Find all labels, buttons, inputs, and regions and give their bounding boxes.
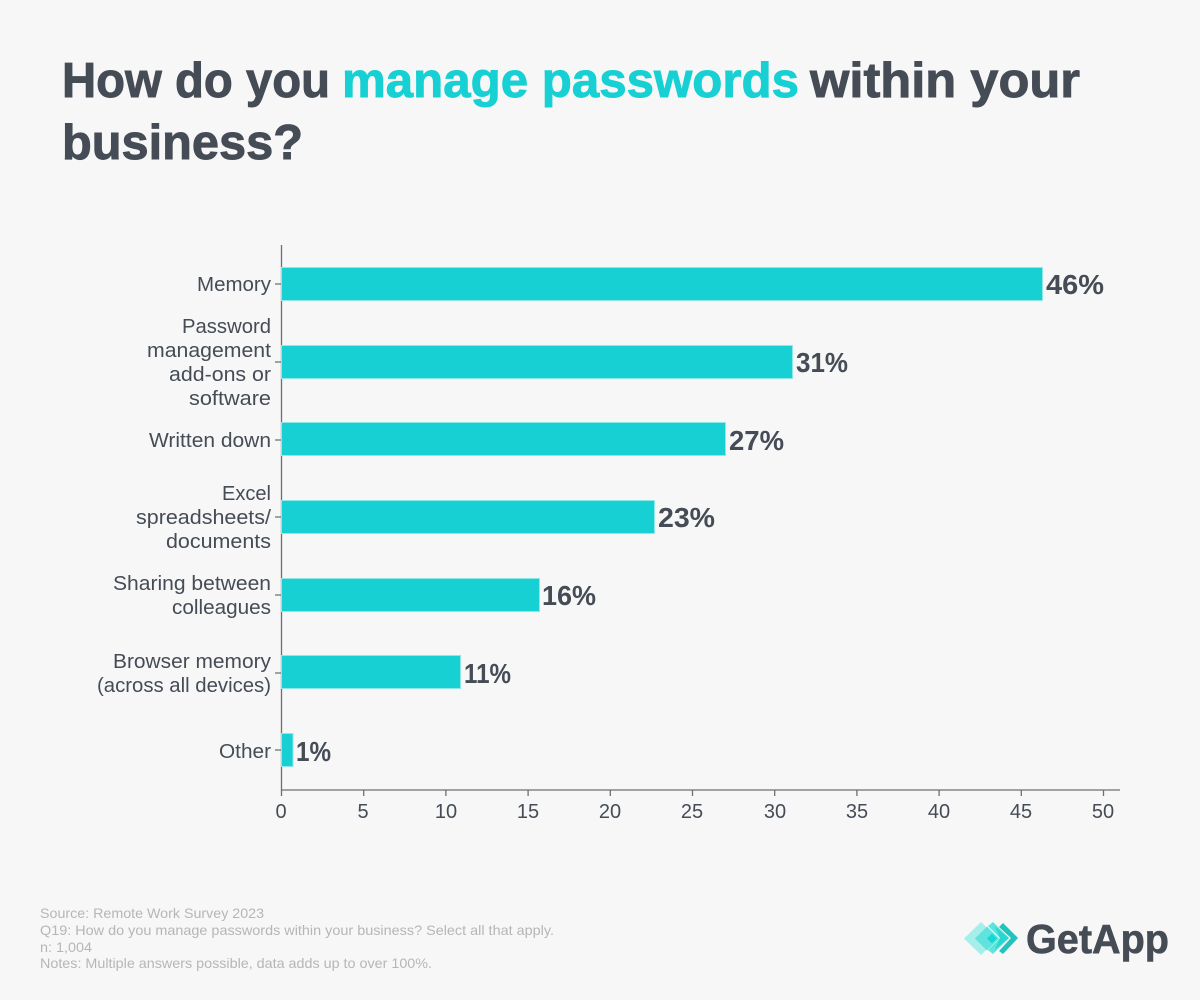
x axis labels: 45 <box>1010 801 1032 823</box>
bar: Password management: software <box>189 388 271 410</box>
bar: Browser memory: 11% <box>464 658 511 689</box>
bar: Password management <box>147 316 848 410</box>
bar: Other: 1% <box>296 736 331 767</box>
bar: Sharing: 16% <box>542 580 596 611</box>
icon: diamonds <box>964 922 1018 955</box>
bar: Excel <box>136 483 715 553</box>
bar: Excel: documents <box>166 531 271 553</box>
bar: Password management: 31% <box>796 347 848 378</box>
x axis labels <box>275 801 1114 823</box>
wordmark: GetApp <box>1026 916 1169 962</box>
bar: Other: Other <box>219 741 271 763</box>
x axis labels: 15 <box>517 801 539 823</box>
source notes: Source: Remote Work Survey 2023 <box>40 905 264 921</box>
source notes <box>40 905 554 971</box>
source notes: Q19: How do you manage passwords within your business? Select all that apply. <box>40 922 554 938</box>
bar: Browser memory: Browser memory <box>113 651 271 673</box>
title: within your <box>809 53 1080 108</box>
axes <box>275 245 1120 796</box>
x axis labels: 10 <box>435 801 457 823</box>
bar: Memory: Memory <box>197 274 271 296</box>
x axis labels: 50 <box>1092 801 1114 823</box>
bar chart <box>97 245 1120 823</box>
x axis labels: 20 <box>599 801 621 823</box>
title: manage passwords <box>342 53 799 108</box>
x axis labels: 25 <box>681 801 703 823</box>
logo: GetApp <box>964 916 1169 962</box>
title <box>62 53 1080 170</box>
x axis labels: 40 <box>928 801 950 823</box>
bar: Sharing: Sharing between <box>113 573 271 595</box>
x axis labels: 0 <box>275 801 287 823</box>
x axis labels: 5 <box>357 801 369 823</box>
bar: Memory: 46% <box>1046 269 1104 300</box>
bar: Written down: 27% <box>729 425 784 456</box>
bar: Excel: Excel <box>222 483 271 505</box>
bar: Written down <box>149 422 784 456</box>
bar: Browser memory <box>97 651 511 697</box>
bar: Password management: Password <box>182 316 271 338</box>
source notes: n: 1,004 <box>40 939 92 955</box>
bar: Other <box>219 734 331 767</box>
bar: Password management: add-ons or <box>169 364 271 386</box>
source notes: Notes: Multiple answers possible, data adds up to over 100%. <box>40 955 432 971</box>
bar: Excel: 23% <box>658 502 715 533</box>
bar: Sharing: colleagues <box>172 597 271 619</box>
bar: Password management: management <box>147 340 271 362</box>
title: business? <box>62 115 303 170</box>
bar: Sharing <box>113 573 596 619</box>
title: How do you <box>62 53 330 108</box>
x axis labels: 35 <box>846 801 868 823</box>
bar: Browser memory: (across all devices) <box>97 675 271 697</box>
bar: Memory <box>197 268 1104 300</box>
bar: Written down: Written down <box>149 430 271 452</box>
x axis labels: 30 <box>764 801 786 823</box>
bar: Excel: spreadsheets/ <box>136 507 271 529</box>
